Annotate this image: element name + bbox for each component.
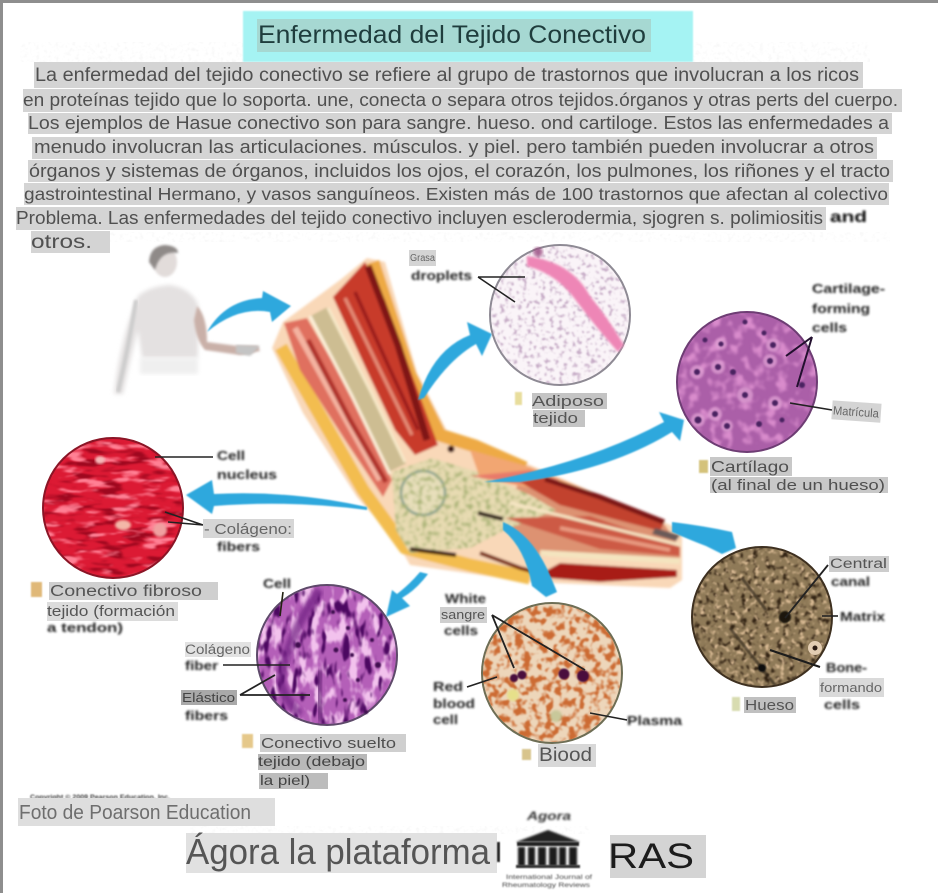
intro text block [16,62,902,253]
micrograph: cartilage [677,312,817,452]
label: matrix [790,400,882,423]
label: elastic fibers: Elástico [182,690,235,705]
intro text block: en proteínas tejido que lo soporta. une, conecta o separa otros tejidos.órganos y otras perts del cuerpo. [23,90,898,110]
arrow: to blood [503,522,557,597]
intro text block: gastrointestinal Hermano, y vasos sanguíneos. Existen más de 100 trastornos que afectan al colectivo [24,184,888,204]
caption: adipose tissue: Adiposo [532,393,604,410]
label: red blood cell: cell [433,712,458,727]
caption: cartilage: Cartílago [711,459,789,476]
label: central canal: canal [831,574,870,589]
label: bone-forming cells: formando [820,680,882,695]
label: cartilage-forming cells: forming [812,301,870,316]
label: bone-forming cells: cells [824,697,860,712]
illustration: elbow anatomy [272,258,682,588]
arrow: to adipose tissue [418,322,492,400]
label: collagen fibers [165,512,294,554]
caption: fibrous tissue [31,582,218,635]
caption: loose tissue: tejido (debajo [258,753,365,769]
caption: adipose tissue [515,392,607,427]
caption: loose tissue: Conectivo suelto [261,735,396,752]
label: elastic fibers: fibers [185,708,228,723]
label: matrix: Matrix [840,609,886,624]
label: red blood cell: blood [433,696,475,711]
micrograph: blood [482,603,622,743]
panel: cartilage [677,281,888,494]
icon: human figure [114,245,260,394]
label: fat droplets: Grasa [410,253,435,264]
label: fat droplets: droplets [411,268,472,283]
label: central canal: Central [830,556,887,571]
label: central canal [785,556,889,618]
caption: fibrous tissue: Conectivo fibroso [50,583,202,600]
micrograph: fibrous tissue [43,438,183,578]
micrograph: loose tissue [257,585,397,725]
label: cartilage-forming cells: Cartilage- [812,281,885,296]
label: collagen fibers: fibers [217,539,260,554]
label: fat droplets [409,250,525,302]
icon: Agora temple logo: Agora [526,809,571,823]
caption: bone [732,697,796,714]
caption: fibrous tissue: a tendon) [47,620,123,635]
intro text block: and [830,209,867,226]
label: cell nucleus: nucleus [217,467,277,482]
icon: Agora temple logo: Rheumatology Reviews [502,883,590,889]
label: cell nucleus [155,448,277,482]
panel: bone [692,547,889,714]
caption: cartilage: (al final de un hueso) [711,477,885,494]
footer: platform name: Ágora la plataforma [186,831,491,872]
icon: Agora temple logo: International Journal of [506,875,592,881]
caption: bone: Hueso [745,698,794,714]
caption: loose tissue: la piel) [260,772,310,788]
panel: fibrous connective tissue [31,438,294,635]
panel: adipose tissue [409,245,630,427]
caption: cartilage [699,457,888,494]
intro text block: órganos y sistemas de órganos, incluidos los ojos, el corazón, los pulmones, los riñones y el tracto [29,161,890,181]
label: bone-forming cells [770,650,884,712]
caption: loose tissue [242,734,406,789]
label: matrix [822,609,886,624]
label: white blood cells: cells [444,623,478,638]
panel: blood [433,591,683,767]
label: cartilage-forming cells [786,281,885,387]
arrow: figure to elbow [207,291,291,332]
panel: loose connective tissue [181,576,406,789]
label: cell nucleus: Cell [217,448,245,463]
caption: blood [522,744,596,767]
micrograph: bone [692,547,832,687]
label: collagen fiber: Colágeno [185,642,250,657]
label: collagen fibers: - Colágeno: [204,521,292,538]
label: collagen fiber: fiber [185,658,218,673]
intro text block: Los ejemplos de Hasue conectivo son para sangre. hueso. ond cartiloge. Estos las enfermedades a [28,113,890,133]
title: Enfermedad del Tejido Conectivo [258,21,646,49]
label: plasma [590,713,683,728]
caption: blood: Biood [539,745,592,766]
footer: RAS: RAS [608,837,694,876]
intro text block: La enfermedad del tejido conectivo se refiere al grupo de trastornos que involucran a los ricos [35,65,859,86]
intro text block: otros. [31,232,92,253]
label: plasma: Plasma [627,713,683,728]
label: elastic fibers [181,675,310,723]
photo credit [18,794,275,826]
label: bone-forming cells: Bone- [826,660,867,675]
caption: fibrous tissue: tejido (formación [47,603,175,620]
caption: adipose tissue: tejido [533,410,578,427]
micrograph: adipose [490,245,630,385]
label: white blood cells: White [445,591,486,606]
title [243,11,693,62]
label: cell: Cell [263,576,291,591]
footer: RAS [608,835,706,878]
icon: Agora temple logo [502,809,592,889]
arrow: to bone [672,522,736,554]
label: red blood cell: Red [433,679,463,694]
arrow: to cartilage [484,412,684,482]
photo credit: Copyright © 2009 Pearson Education, Inc. [30,794,170,801]
intro text block: Problema. Las enfermedades del tejido conectivo incluyen esclerodermia, sjogren s. polimiositis [16,208,823,228]
label: matrix: Matrícula [832,403,880,421]
label: white blood cells [440,591,585,670]
arrow: to loose tissue [386,572,428,617]
label: cartilage-forming cells: cells [812,320,847,335]
label: red blood cell [433,677,497,727]
label: cell [263,576,291,616]
intro text block: menudo involucran las articulaciones. músculos. y piel. pero también pueden involucrar a otros [34,137,874,157]
photo credit: Foto de Poarson Education [19,802,251,824]
label: white blood cells: sangre [441,607,485,622]
label: collagen fiber [185,642,290,673]
arrow: to fibrous tissue [186,480,367,514]
